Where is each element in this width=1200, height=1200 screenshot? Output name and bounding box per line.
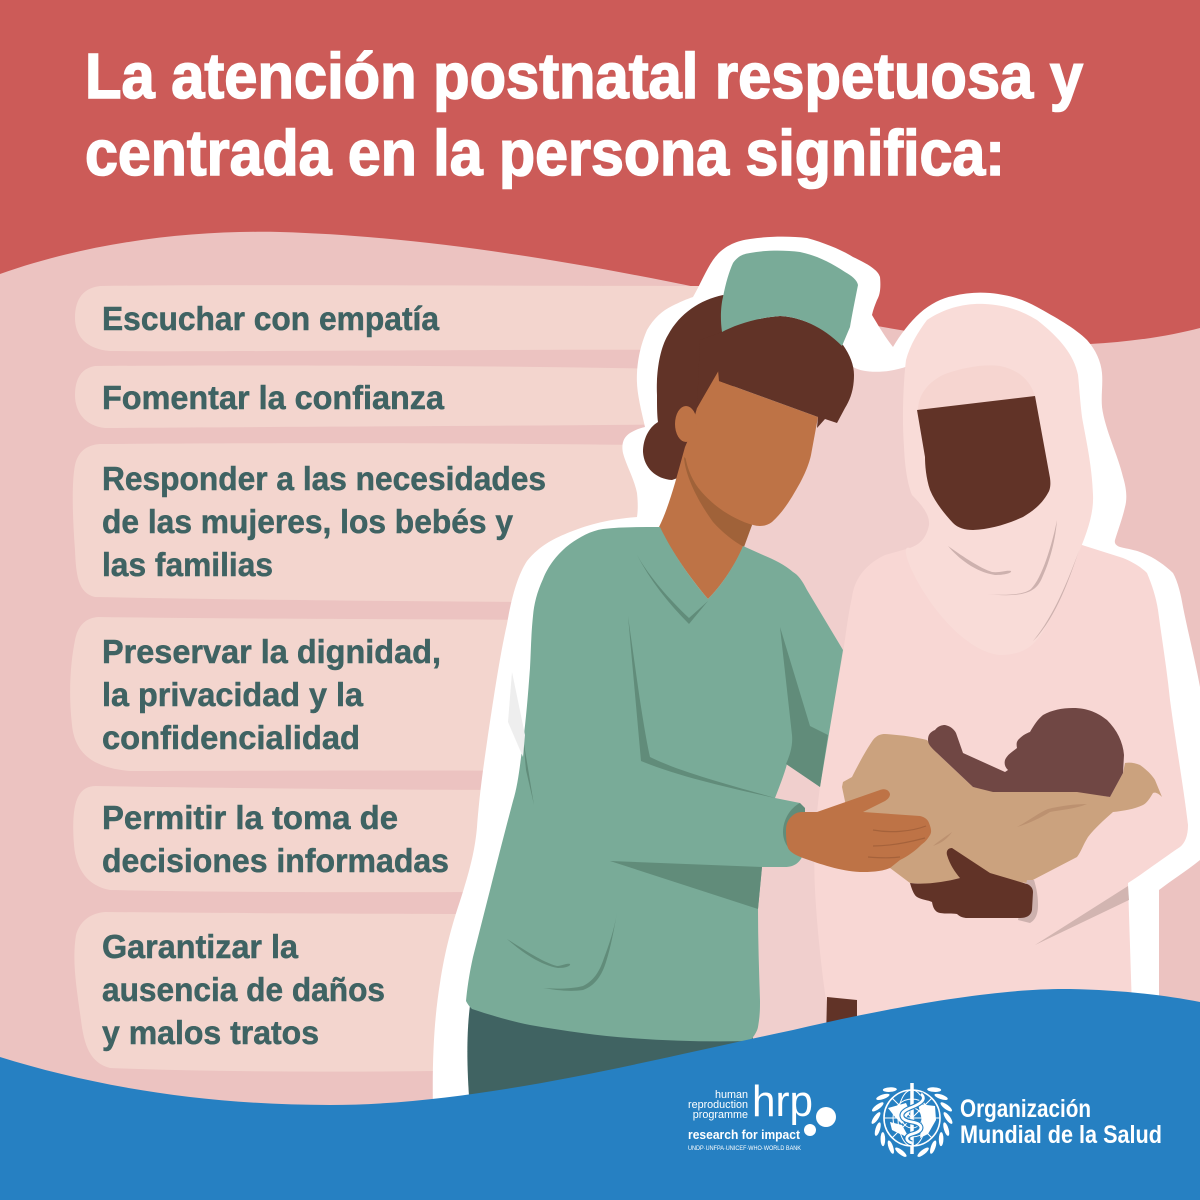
logo: hrp: UNDP·UNFPA·UNICEF·WHO·WORLD BANK — [688, 1146, 801, 1152]
logo: hrp — [688, 1077, 836, 1152]
white-side shadow behind nurse's back — [508, 672, 525, 757]
panel: responder a las necesidades — [73, 443, 720, 603]
nurse: pants — [467, 1005, 760, 1110]
logo: hrp: programme — [693, 1109, 748, 1121]
top: back crease — [523, 738, 534, 805]
panel: permitir la toma de decisiones: Permitir la toma de — [102, 799, 398, 836]
panel: fomentar la confianza: Fomentar la confianza — [102, 379, 445, 416]
logo: Organización Mundial de la Salud: Organización — [960, 1095, 1091, 1123]
panel: preservar la dignidad — [70, 617, 560, 771]
mother: foot — [826, 997, 857, 1040]
top: dark sleeve shadow — [780, 627, 828, 787]
title — [85, 40, 1083, 189]
white sticker outline — [433, 237, 1200, 1110]
top: under-sleeve shadow — [610, 861, 762, 909]
logo: WHO emblem — [870, 1083, 954, 1158]
nurse: cap — [721, 251, 858, 346]
panel: garantizar la ausencia de daños: y malos tratos — [102, 1014, 319, 1051]
nurse: fringe — [697, 316, 854, 428]
panel: responder a las necesidades: las familias — [102, 546, 273, 583]
blanket: creases — [933, 804, 1087, 846]
mother: headscarf — [903, 304, 1093, 655]
background: blue bottom wave — [0, 989, 1200, 1200]
panel: permitir la toma de decisiones — [73, 786, 540, 892]
mother: hand — [910, 848, 1033, 918]
illustration: nurse and mother with baby — [433, 237, 1200, 1110]
logo: hrp: research for impact — [688, 1128, 801, 1142]
panel: escuchar con empatía — [75, 285, 720, 351]
baby: blanket — [842, 734, 1162, 884]
logo: hrp: hrp — [752, 1077, 813, 1126]
top: neckline crease — [637, 555, 708, 624]
logo: Organización Mundial de la Salud — [960, 1095, 1162, 1149]
panel: fomentar la confianza — [75, 365, 720, 428]
backdrop between figures — [700, 366, 970, 1070]
top: pocket creases — [507, 913, 617, 991]
nurse: hand — [786, 789, 931, 872]
nurse: neck shadow — [684, 457, 752, 547]
logo: hrp: human — [715, 1089, 748, 1101]
nurse: top — [466, 527, 843, 1041]
title: centrada en la persona significa: — [85, 117, 1005, 189]
headscarf: creases — [948, 520, 1080, 641]
panel: responder a las necesidades: de las mujeres, los bebés y — [102, 503, 514, 540]
panel: garantizar la ausencia de daños: ausencia de daños — [102, 971, 385, 1008]
mother: face — [917, 396, 1050, 530]
mother: hand shadow — [1018, 880, 1038, 923]
panel: responder a las necesidades: Responder a las necesidades — [102, 460, 546, 497]
nurse: hair back and bun — [643, 295, 760, 480]
logo: Organización Mundial de la Salud: Mundial de la Salud — [960, 1121, 1162, 1149]
logo: hrp: reproduction — [688, 1099, 748, 1111]
nurse: face and ear — [675, 370, 818, 526]
baby: body — [928, 708, 1124, 797]
panel: permitir la toma de decisiones: decisiones informadas — [102, 842, 449, 879]
title: La atención postnatal respetuosa y — [85, 40, 1083, 112]
headscarf: inner hood — [918, 365, 1036, 430]
nurse: neck — [659, 447, 752, 599]
panel: preservar la dignidad: confidencialidad — [102, 719, 360, 756]
panel: garantizar la ausencia de daños — [74, 912, 520, 1072]
panel: garantizar la ausencia de daños: Garantizar la — [102, 928, 299, 965]
mother: body — [814, 545, 1188, 1040]
list of care principles — [70, 285, 720, 1072]
panel: preservar la dignidad: Preservar la dignidad, — [102, 633, 441, 670]
panel: escuchar con empatía: Escuchar con empatía — [102, 300, 440, 337]
panel: preservar la dignidad: la privacidad y la — [102, 676, 364, 713]
mother: crease on body — [1035, 886, 1129, 945]
top: arm crease — [628, 616, 775, 798]
nurse: cuff — [783, 803, 805, 855]
